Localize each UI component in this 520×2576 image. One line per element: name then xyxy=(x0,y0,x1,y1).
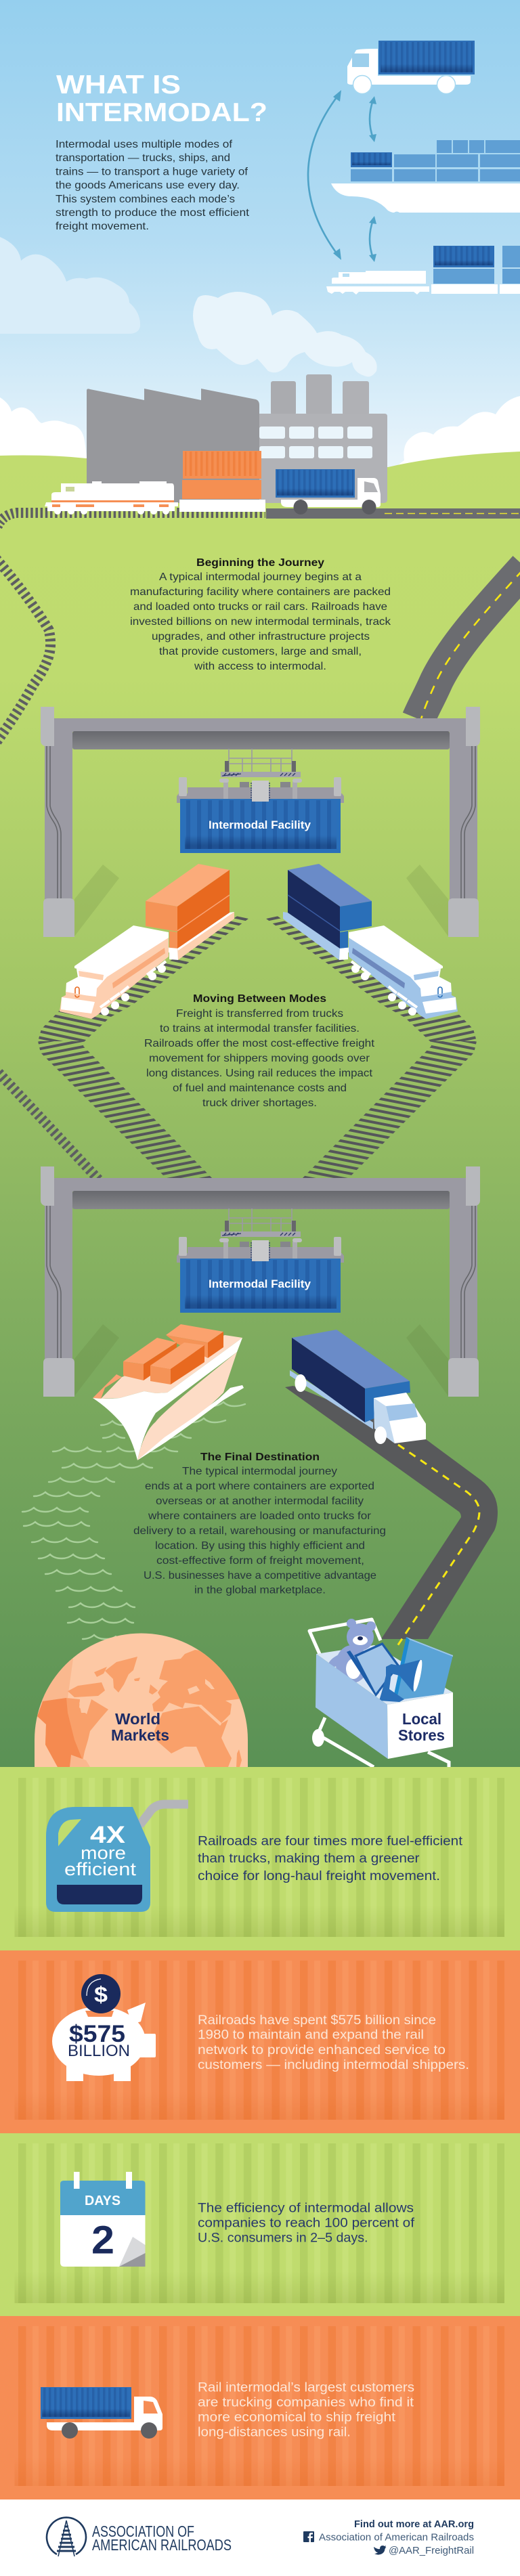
cloud: upper left xyxy=(0,237,140,334)
intro text: trains — to transport a huge variety of xyxy=(56,167,248,177)
text: moving between modes: Railroads offer the most cost-effective freight xyxy=(144,1038,375,1049)
text: trucking customers: long-distances using rail. xyxy=(198,2425,351,2440)
footer links: @AAR_FreightRail xyxy=(389,2545,474,2556)
text: moving between modes: to trains at intermodal transfer facilities. xyxy=(160,1023,360,1034)
text: the final destination xyxy=(133,1451,386,1596)
icon: facebook xyxy=(303,2531,314,2542)
arrows between modes xyxy=(308,90,376,262)
icon: calendar xyxy=(60,2172,145,2267)
icon: piggy bank xyxy=(52,1974,156,2081)
label: world markets: World xyxy=(115,1710,160,1728)
icon: calendar: DAYS xyxy=(85,2193,121,2208)
intro text: strength to produce the most efficient xyxy=(56,207,250,219)
title xyxy=(56,70,267,127)
text: investment: customers — including intermodal shippers. xyxy=(198,2058,469,2072)
text: the final destination: The Final Destination xyxy=(200,1451,320,1463)
text: delivery days: The efficiency of intermodal allows xyxy=(198,2202,414,2215)
footer links: Find out more at AAR.org xyxy=(354,2518,474,2530)
text: trucking customers: more economical to ship freight xyxy=(198,2410,396,2425)
icon: truck xyxy=(41,2387,162,2439)
text: beginning the journey: Beginning the Journey xyxy=(196,557,324,569)
intro text xyxy=(56,139,250,232)
road: to local stores xyxy=(285,1386,498,1650)
label: intermodal facility one: Intermodal Facility xyxy=(209,818,311,831)
text: investment: 1980 to maintain and expand the rail xyxy=(198,2028,424,2042)
text: the final destination: overseas or at another intermodal facility xyxy=(156,1496,364,1507)
label: intermodal facility two: Intermodal Facility xyxy=(209,1278,311,1290)
icon: piggy bank: $575 xyxy=(69,2021,125,2047)
text: beginning the journey: manufacturing facility where containers are packed xyxy=(130,586,391,598)
text: the final destination: ends at a port where containers are exported xyxy=(145,1481,374,1492)
icon: locomotive with containers xyxy=(326,246,520,294)
text: the final destination: delivery to a retail, warehousing or manufacturing xyxy=(133,1525,386,1537)
label: local stores: Local xyxy=(402,1710,441,1728)
text: delivery days: companies to reach 100 percent of xyxy=(198,2217,415,2230)
panel: delivery days xyxy=(0,2133,520,2316)
cloud: left horizon xyxy=(0,397,88,467)
intro text: transportation — trucks, ships, and xyxy=(56,152,230,164)
text: moving between modes: long distances. Using rail reduces the impact xyxy=(146,1068,373,1079)
text: beginning the journey xyxy=(130,557,391,672)
icon: twitter xyxy=(374,2546,386,2555)
ground: hills and landscape xyxy=(0,452,520,1767)
title: WHAT IS xyxy=(56,70,181,100)
icon: fuel jug: 4X xyxy=(90,1822,126,1848)
icon: piggy bank: BILLION xyxy=(68,2042,130,2060)
icon: white truck with blue container xyxy=(347,41,475,93)
panel: investment xyxy=(0,1950,520,2133)
text: fuel efficiency: than trucks, making them a greener xyxy=(198,1852,420,1866)
factory truck with blue container xyxy=(276,469,381,515)
intro text: Intermodal uses multiple modes of xyxy=(56,139,233,150)
text: trucking customers xyxy=(198,2380,414,2440)
text: fuel efficiency xyxy=(198,1835,463,1883)
intro text: the goods Americans use every day. xyxy=(56,180,240,191)
cloud: right horizon xyxy=(386,396,520,474)
text: beginning the journey: A typical intermodal journey begins at a xyxy=(159,571,362,583)
background: sky xyxy=(0,0,520,542)
text: investment xyxy=(198,2013,469,2072)
text: moving between modes: Freight is transferred from trucks xyxy=(176,1008,343,1020)
text: moving between modes: movement for shippers moving goods over xyxy=(149,1053,370,1064)
text: the final destination: in the global marketplace. xyxy=(194,1584,326,1596)
crane: first intermodal facility xyxy=(41,707,480,937)
panel: trucking customers xyxy=(0,2316,520,2499)
text: the final destination: location. By using this highly efficient and xyxy=(155,1540,365,1552)
label: world markets: Markets xyxy=(111,1726,169,1744)
text: investment: Railroads have spent $575 billion since xyxy=(198,2013,436,2028)
label: local stores: Stores xyxy=(398,1726,445,1744)
crane: second intermodal facility xyxy=(41,1166,480,1397)
text: the final destination: The typical intermodal journey xyxy=(182,1466,337,1477)
rail tracks: V between facilities xyxy=(38,915,477,1178)
shopping cart with goods xyxy=(309,1619,453,1767)
label: local stores xyxy=(398,1710,445,1744)
intro text: This system combines each mode’s xyxy=(56,194,235,205)
icon: fuel jug: more xyxy=(81,1843,126,1863)
factory train with containers xyxy=(45,451,265,515)
text: beginning the journey: that provide customers, large and small, xyxy=(159,646,362,657)
text: moving between modes: Moving Between Modes xyxy=(193,993,326,1005)
train: orange containers xyxy=(60,864,234,1019)
text: beginning the journey: invested billions on new intermodal terminals, track xyxy=(130,616,391,628)
panel: fuel efficiency xyxy=(0,1767,520,1950)
text: delivery days: U.S. consumers in 2–5 days. xyxy=(198,2231,368,2245)
text: moving between modes: truck driver shortages. xyxy=(202,1097,317,1109)
text: delivery days xyxy=(198,2202,415,2245)
footer links: Association of American Railroads xyxy=(319,2532,474,2543)
text: beginning the journey: with access to intermodal. xyxy=(194,661,326,672)
text: beginning the journey: and loaded onto trucks or rail cars. Railroads have xyxy=(133,601,387,613)
text: moving between modes: of fuel and maintenance costs and xyxy=(173,1083,347,1094)
text: fuel efficiency: Railroads are four times more fuel-efficient xyxy=(198,1835,463,1848)
text: moving between modes xyxy=(144,993,375,1109)
icon: calendar: 2 xyxy=(91,2218,114,2263)
icon: fuel jug: efficient xyxy=(64,1859,137,1879)
globe: world markets xyxy=(27,1633,254,1767)
footer xyxy=(0,2499,520,2576)
text: fuel efficiency: choice for long-haul freight movement. xyxy=(198,1869,440,1883)
factory xyxy=(87,374,387,503)
text: trucking customers: are trucking companies who find it xyxy=(198,2395,414,2410)
waves xyxy=(22,1402,245,1639)
text: beginning the journey: upgrades, and other infrastructure projects xyxy=(152,631,370,642)
icon: piggy bank: $ xyxy=(94,1982,108,2007)
icon: container ship xyxy=(331,140,520,213)
logo: association of american railroads: ASSOCIATION OF xyxy=(92,2523,194,2540)
intro text: freight movement. xyxy=(56,221,149,232)
rail track: main line and left edge xyxy=(0,513,265,1181)
footer links xyxy=(303,2518,474,2556)
label: world markets xyxy=(111,1710,169,1744)
text: the final destination: where containers are loaded onto trucks for xyxy=(148,1510,372,1522)
text: investment: network to provide enhanced service to xyxy=(198,2043,446,2057)
ship with orange containers xyxy=(93,1324,244,1460)
train: blue containers xyxy=(283,864,458,1019)
text: the final destination: U.S. businesses have a competitive advantage xyxy=(144,1570,376,1581)
icon: fuel jug xyxy=(46,1804,188,1912)
title: INTERMODAL? xyxy=(56,98,267,127)
logo: association of american railroads xyxy=(47,2518,232,2556)
text: trucking customers: Rail intermodal’s largest customers xyxy=(198,2380,414,2395)
truck: navy and blue container xyxy=(290,1330,426,1444)
road: from factory xyxy=(266,508,520,719)
text: the final destination: cost-effective form of freight movement, xyxy=(156,1555,364,1567)
cloud: factory smoke xyxy=(193,292,377,376)
logo: association of american railroads: AMERICAN RAILROADS xyxy=(92,2536,232,2554)
